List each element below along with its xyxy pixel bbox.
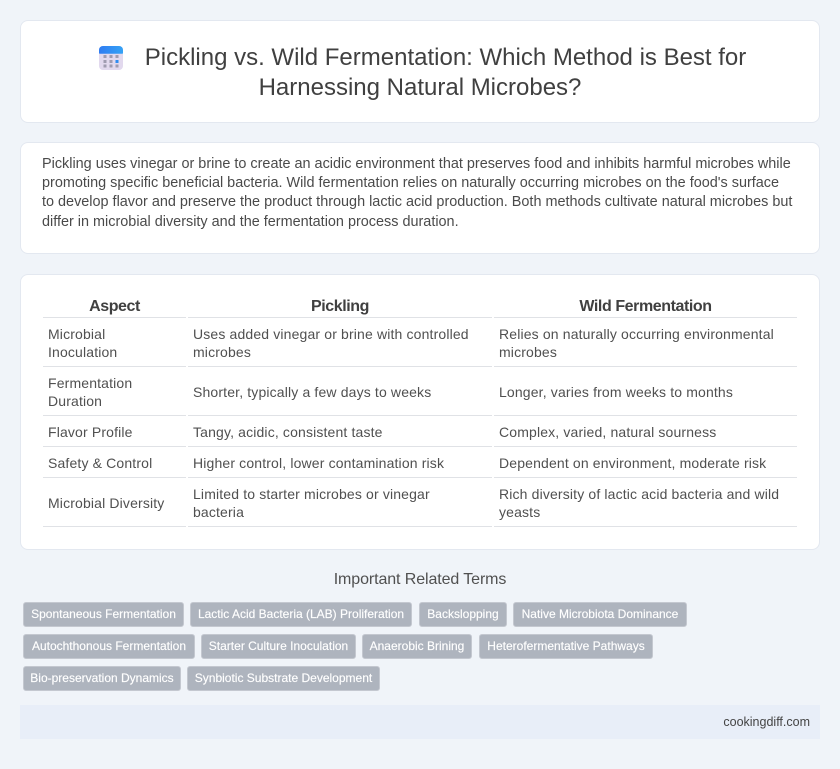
row: fermentation duration: Shorter, typically a few days to weeks [193, 384, 431, 400]
row: fermentation duration: Longer, varies from weeks to months [499, 384, 733, 400]
row: microbial inoculation: microbes [193, 344, 251, 360]
footer bar [20, 705, 820, 739]
tag [187, 666, 380, 691]
tag [23, 634, 195, 659]
tag: Synbiotic Substrate Development [195, 671, 372, 685]
row: microbial inoculation: Relies on naturally occurring environmental [499, 326, 774, 342]
icon: calendar [99, 46, 123, 70]
header panel [20, 20, 820, 123]
table header [89, 298, 712, 315]
row: fermentation duration [48, 375, 733, 409]
intro paragraph [42, 156, 792, 230]
row: flavor profile: Complex, varied, natural sourness [499, 424, 716, 440]
tag: Anaerobic Brining [370, 639, 464, 653]
tag [479, 634, 653, 659]
row: flavor profile [48, 424, 716, 440]
row: microbial diversity: Limited to starter microbes or vinegar [193, 486, 430, 502]
row: microbial diversity: Rich diversity of lactic acid bacteria and wild [499, 486, 779, 502]
title: Harnessing Natural Microbes? [259, 74, 581, 100]
tag [190, 602, 412, 627]
tag: Backslopping [427, 607, 499, 621]
row: fermentation duration: Fermentation [48, 375, 132, 391]
row: microbial inoculation: microbes [499, 344, 557, 360]
heading: related terms: Important Related Terms [334, 571, 506, 588]
row: safety and control: Safety & Control [48, 455, 152, 471]
row: flavor profile: Tangy, acidic, consistent taste [193, 424, 383, 440]
tag [23, 602, 184, 627]
row: microbial diversity: bacteria [193, 504, 244, 520]
tag [362, 634, 472, 659]
row: safety and control: Higher control, lower contamination risk [193, 455, 444, 471]
tag: Bio-preservation Dynamics [30, 671, 174, 685]
title [145, 44, 746, 100]
tag [23, 666, 181, 691]
tag [513, 602, 687, 627]
intro paragraph: to develop flavor and preserve the product through lactic acid production. Both methods cultivate natural microbes but [42, 194, 792, 210]
tag [419, 602, 507, 627]
row: microbial diversity: Microbial Diversity [48, 495, 164, 511]
intro paragraph: Pickling uses vinegar or brine to create an acidic environment that preserves food and inhibits harmful microbes while [42, 156, 791, 172]
row: safety and control: Dependent on environment, moderate risk [499, 455, 766, 471]
tag: Starter Culture Inoculation [209, 639, 348, 653]
row: microbial diversity: yeasts [499, 504, 540, 520]
tag: Native Microbiota Dominance [522, 607, 678, 621]
title: Pickling vs. Wild Fermentation: Which Method is Best for [145, 44, 746, 71]
row: microbial inoculation: Uses added vinegar or brine with controlled [193, 326, 469, 342]
row: microbial inoculation: Microbial [48, 326, 105, 342]
tag: Lactic Acid Bacteria (LAB) Proliferation [198, 607, 404, 621]
table header: Aspect [89, 298, 140, 315]
intro paragraph: promoting specific beneficial bacteria. Wild fermentation relies on naturally occurring microbes on the food's surface [42, 175, 779, 191]
panel: intro text [20, 142, 820, 254]
tag: Autochthonous Fermentation [32, 639, 186, 653]
tag: Spontaneous Fermentation [31, 607, 176, 621]
table header: Wild Fermentation [579, 298, 712, 315]
footer credit: cookingdiff.com [723, 715, 810, 729]
table header: Pickling [311, 298, 369, 315]
related term tags [23, 602, 687, 691]
row: fermentation duration: Duration [48, 393, 102, 409]
row: microbial inoculation [48, 326, 774, 360]
intro paragraph: differ in microbial diversity and the fermentation process duration. [42, 214, 459, 230]
panel: comparison table [20, 274, 820, 550]
row: safety and control [48, 455, 766, 471]
row: microbial inoculation: Inoculation [48, 344, 117, 360]
tag: Heterofermentative Pathways [487, 639, 645, 653]
row: microbial diversity [48, 486, 779, 520]
row: flavor profile: Flavor Profile [48, 424, 133, 440]
tag [201, 634, 356, 659]
